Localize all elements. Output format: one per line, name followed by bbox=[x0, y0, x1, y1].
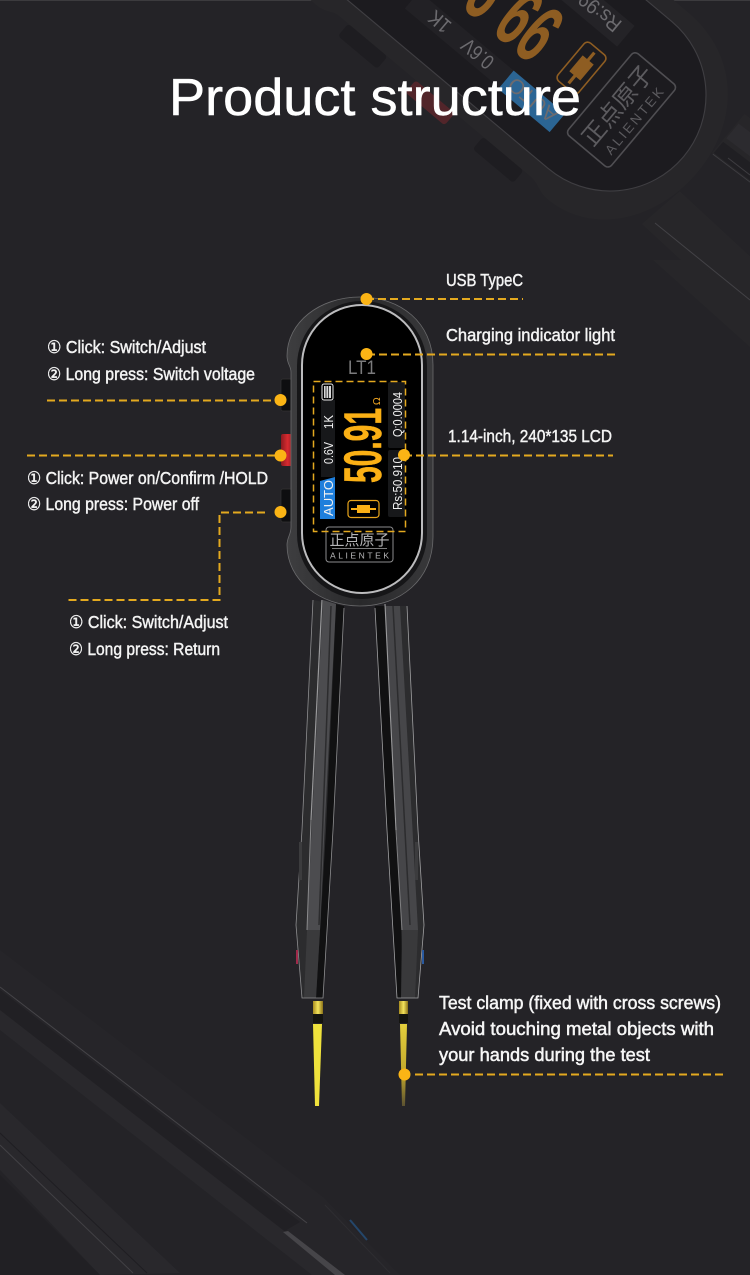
ghost device top right: AUTO bbox=[504, 72, 563, 127]
label: test clamp bbox=[439, 992, 721, 1065]
label: top button bbox=[47, 337, 255, 384]
button: bottom side bbox=[281, 489, 292, 522]
AUTO tag bbox=[320, 477, 335, 519]
label: power button: ② Long press: Power off bbox=[27, 494, 199, 514]
device screen bbox=[302, 305, 422, 593]
device body bbox=[287, 297, 433, 606]
label: bottom button bbox=[69, 612, 228, 659]
LT1 model name: LT1 bbox=[348, 357, 376, 379]
LCD dashed outline bbox=[314, 382, 406, 532]
button: red power bbox=[281, 434, 292, 466]
status band bbox=[321, 400, 335, 477]
ghost device top right: 0.6V bbox=[457, 33, 499, 73]
label: power button bbox=[27, 468, 268, 514]
ALIENTEK logo bbox=[326, 527, 393, 562]
component icon bbox=[348, 500, 379, 518]
label: top button: ① Click: Switch/Adjust bbox=[47, 337, 206, 357]
battery icon bbox=[322, 384, 333, 400]
ghost device top right: ALIENTEK bbox=[602, 83, 668, 158]
label: bottom button: ① Click: Switch/Adjust bbox=[69, 612, 228, 632]
label: top button: ② Long press: Switch voltage bbox=[47, 364, 255, 384]
ghost device top right bbox=[237, 0, 750, 500]
device: left arm bbox=[296, 600, 344, 998]
ghost arms bottom left bbox=[0, 950, 400, 1275]
callout dots bbox=[274, 293, 410, 1080]
voltage text: 0.6V bbox=[321, 442, 336, 464]
Rs value: Rs:50.910 bbox=[390, 457, 405, 510]
left gold test tip bbox=[313, 1001, 323, 1106]
ghost device top right: 1K bbox=[424, 5, 456, 37]
readout band Q bbox=[388, 382, 405, 448]
label: USB TypeC: USB TypeC bbox=[446, 270, 523, 290]
ghost arms top right bbox=[653, 158, 750, 347]
label: power button: ① Click: Power on/Confirm /HOLD bbox=[27, 468, 268, 488]
Q value: Q:0.0004 bbox=[390, 392, 405, 437]
button: top side bbox=[281, 379, 292, 411]
label: charging indicator: Charging indicator light bbox=[446, 325, 615, 345]
right gold test tip bbox=[399, 1001, 408, 1106]
ghost device top right: 正点原子 bbox=[572, 56, 660, 152]
label: bottom button: ② Long press: Return bbox=[69, 639, 220, 659]
label: test clamp: Test clamp (fixed with cross screws) bbox=[439, 992, 721, 1013]
ALIENTEK logo: ALIENTEK bbox=[330, 550, 389, 560]
label: test clamp: Avoid touching metal objects with bbox=[439, 1018, 714, 1039]
ALIENTEK logo: 正点原子 bbox=[329, 529, 390, 550]
readout band Rs bbox=[388, 450, 405, 517]
ohm unit: Ω bbox=[372, 397, 383, 405]
AUTO text: AUTO bbox=[321, 480, 336, 516]
label: LCD: 1.14-inch, 240*135 LCD bbox=[448, 426, 612, 446]
main reading: 50.91 bbox=[334, 408, 393, 483]
device: right arm bbox=[375, 604, 424, 998]
title: Product structure bbox=[169, 69, 581, 127]
label: test clamp: your hands during the test bbox=[439, 1044, 650, 1065]
LCD display bbox=[320, 382, 405, 519]
frequency text: 1K bbox=[321, 415, 336, 429]
device inner band bbox=[297, 301, 427, 599]
callout lines bbox=[27, 299, 724, 1074]
